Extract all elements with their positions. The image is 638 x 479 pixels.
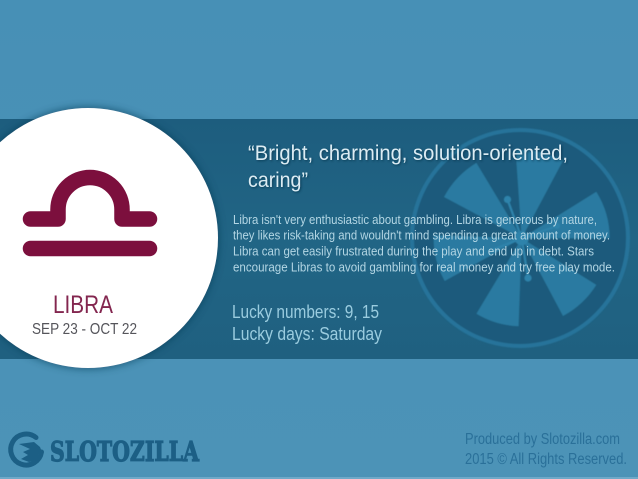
bottom light strip	[0, 477, 638, 479]
central dark band	[0, 119, 638, 359]
wheel light sectors	[434, 150, 610, 326]
quote text	[248, 142, 568, 192]
sign circle shadow	[0, 107, 219, 369]
quote shadow	[249, 143, 569, 193]
description text: Libra can get easily frustrated during the play and end up in debt. Stars	[233, 244, 594, 258]
icon: dragon ring	[11, 434, 42, 465]
logo: slotozilla	[11, 434, 200, 468]
description text: Libra isn't very enthusiastic about gambling. Libra is generous by nature,	[233, 212, 597, 227]
lucky numbers and days: Lucky numbers: 9, 15	[232, 302, 379, 322]
wheel outer rim	[412, 130, 628, 346]
quote text: caring”	[248, 169, 308, 192]
wheel centre spindle	[492, 196, 560, 282]
quote text: “Bright, charming, solution-oriented,	[248, 142, 568, 165]
icon: libra glyph	[30, 178, 150, 248]
production credits	[465, 431, 627, 468]
lucky numbers and days	[232, 302, 382, 344]
sign dates: SEP 23 - OCT 22	[32, 321, 137, 338]
sign circle	[0, 108, 218, 368]
quote shadow: “Bright, charming, solution-oriented,	[249, 143, 569, 166]
quote shadow: caring”	[249, 170, 309, 193]
description text	[233, 212, 615, 274]
sign name: LIBRA	[53, 291, 113, 319]
lucky numbers and days: Lucky days: Saturday	[232, 324, 382, 344]
wheel watermark	[412, 130, 628, 346]
logo wordmark: SLOTOZILLA	[50, 437, 200, 468]
quote	[248, 142, 569, 193]
